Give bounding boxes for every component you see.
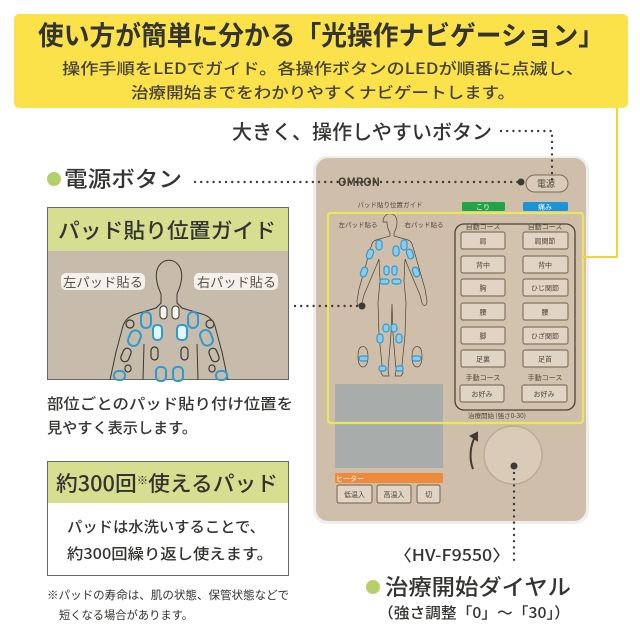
course headings — [466, 222, 562, 383]
panel heading: 使えるパッド — [148, 468, 278, 498]
power button — [526, 175, 568, 192]
connector line from banner — [583, 105, 617, 257]
course headings: 自動コース — [528, 222, 562, 232]
brand logo: OMRON — [338, 174, 380, 190]
left column buttons — [460, 232, 505, 402]
dial label: 治療開始ダイヤル — [385, 570, 571, 602]
left pad caption: 左パッド貼る — [338, 219, 378, 229]
left pad tag: 左パッド貼る — [63, 272, 143, 291]
course button group — [455, 222, 575, 410]
heater buttons: 切 — [425, 490, 432, 500]
footnote: 短くなる場合があります。 — [59, 607, 193, 623]
banner description: 治療開始までをわかりやすくナビゲートします。 — [131, 81, 515, 103]
button labels: 腰 — [542, 308, 548, 318]
course headings: 手動コース — [528, 373, 562, 383]
stiffness label: こり — [476, 202, 490, 212]
button labels: 肩 — [480, 236, 486, 246]
button labels: お好み — [472, 390, 492, 400]
rotation arrow — [471, 433, 477, 469]
right column buttons — [522, 232, 568, 402]
button labels: 足裏 — [476, 354, 490, 364]
device body — [313, 156, 589, 524]
pain label — [523, 202, 568, 212]
heater label: ヒーター — [336, 474, 364, 484]
body figure — [357, 214, 427, 376]
footnote: ※パッドの寿命は、肌の状態、保管状態などで — [47, 587, 289, 603]
dotted leader: pad guide — [295, 302, 366, 310]
dotted leader: power button — [195, 178, 524, 186]
panel heading — [48, 462, 288, 503]
model name: 〈HV-F9550〉 — [394, 542, 510, 566]
course headings: 自動コース — [466, 222, 500, 232]
yellow banner — [14, 14, 628, 108]
banner description — [62, 57, 584, 103]
panel heading: 約300回 — [56, 468, 134, 498]
button labels: 肩関節 — [534, 236, 556, 246]
right pad caption: 右パッド貼る — [404, 219, 444, 229]
panel heading — [48, 208, 288, 251]
button labels: 腰 — [480, 308, 486, 318]
pain label: 痛み — [538, 202, 552, 212]
power button label: 電源ボタン — [64, 162, 182, 194]
right pad tag: 右パッド貼る — [197, 272, 276, 291]
panel heading: ※ — [137, 472, 148, 488]
button labels: ひざ関節 — [531, 332, 559, 342]
panel text: 約300回繰り返し使えます。 — [67, 543, 273, 564]
panel text — [67, 516, 273, 564]
navigation highlight frame — [328, 213, 583, 423]
treatment start caption: 治療開始 (強さ0-30) — [468, 410, 526, 420]
large buttons label: 大きく、操作しやすいボタン — [232, 116, 492, 145]
button labels: 胸 — [480, 284, 486, 294]
LCD screen — [335, 384, 443, 468]
stiffness label — [462, 202, 505, 212]
button labels: 足首 — [538, 354, 552, 364]
pad guide description: 部位ごとのパッド貼り付け位置を — [47, 393, 293, 414]
dial range note: （強さ調整「0」〜「30」） — [378, 602, 570, 623]
treatment dial — [484, 426, 542, 484]
button labels: 背中 — [538, 260, 552, 270]
heater buttons: 低温入 — [344, 490, 365, 500]
heater buttons: 高温入 — [384, 490, 404, 500]
pad guide caption: パッド貼り位置ガイド — [358, 199, 422, 209]
button labels — [472, 236, 559, 400]
power button: 電源 — [537, 177, 555, 190]
dotted leader: large buttons — [501, 131, 552, 180]
panel: reusable pad — [48, 462, 288, 576]
button labels: ひじ関節 — [531, 284, 559, 294]
panel heading: パッド貼り位置ガイド — [58, 215, 276, 245]
panel text: パッドは水洗いすることで、 — [67, 516, 265, 537]
dotted leader: dial — [510, 462, 518, 564]
heater buttons — [337, 485, 440, 503]
footnote — [47, 587, 289, 623]
heater label — [335, 473, 443, 484]
pad guide description — [47, 393, 293, 438]
button labels: 背中 — [476, 260, 490, 270]
button labels: 脚 — [480, 332, 486, 342]
course headings: 手動コース — [466, 373, 500, 383]
pad guide description: 見やすく表示します。 — [47, 417, 197, 438]
panel: pad position guide — [48, 208, 288, 381]
enlarged body figure — [110, 260, 228, 381]
banner description: 操作手順をLEDでガイド。各操作ボタンのLEDが順番に点滅し、 — [62, 57, 584, 79]
banner title: 使い方が簡単に分かる「光操作ナビゲーション」 — [38, 14, 604, 53]
button labels: お好み — [534, 390, 554, 400]
